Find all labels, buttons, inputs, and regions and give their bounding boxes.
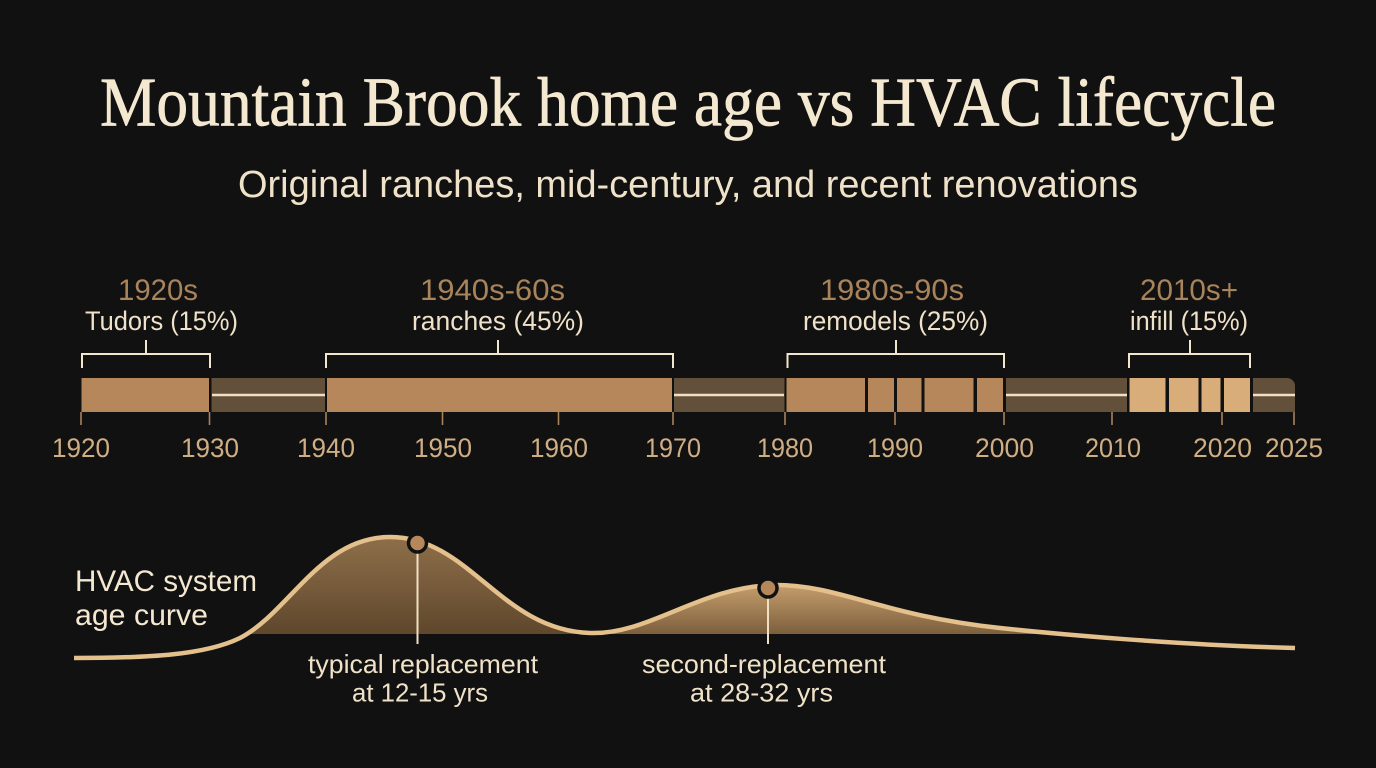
year labels: 2010 xyxy=(1085,433,1141,463)
curve line xyxy=(74,537,1295,658)
era label: 1920s Tudors: Tudors (15%) xyxy=(85,306,238,336)
era label: 1980s-90s remodels xyxy=(803,274,988,336)
year labels: 1920 xyxy=(52,433,110,463)
timeline bar xyxy=(82,378,1295,412)
annotation: second replacement xyxy=(642,649,887,708)
era label: 1940s-60s ranches: ranches (45%) xyxy=(412,306,584,336)
year ticks xyxy=(81,412,1294,425)
title: Mountain Brook home age vs HVAC lifecycle xyxy=(100,64,1276,142)
era label: 1920s Tudors xyxy=(85,274,238,336)
era label: 2010s+ infill: infill (15%) xyxy=(1130,306,1248,336)
annotation: second replacement: at 28-32 yrs xyxy=(690,678,833,708)
HVAC age curve chart xyxy=(74,534,1296,660)
year labels: 2000 xyxy=(975,433,1034,463)
year labels: 1980 xyxy=(757,433,813,463)
era label: 1980s-90s remodels: remodels (25%) xyxy=(803,306,988,336)
era label: 2010s+ infill: 2010s+ xyxy=(1140,274,1238,307)
year labels: 1940 xyxy=(297,433,355,463)
year labels: 2020 xyxy=(1193,433,1252,463)
year labels: 1950 xyxy=(414,433,472,463)
subtitle: Original ranches, mid-century, and recent renovations xyxy=(238,164,1138,206)
marker: second replacement xyxy=(759,579,777,644)
infographic canvas xyxy=(54,76,1322,707)
year labels: 1960 xyxy=(530,433,588,463)
year labels: 1930 xyxy=(181,433,239,463)
year labels: 1990 xyxy=(867,433,923,463)
era label: 1940s-60s ranches: 1940s-60s xyxy=(420,274,565,307)
year labels: 1970 xyxy=(645,433,701,463)
area fill: first replacement hump xyxy=(251,539,576,634)
year labels: 2025 xyxy=(1265,433,1323,463)
chart label: HVAC system age curve: age curve xyxy=(75,599,208,632)
year labels xyxy=(52,433,1323,463)
era label: 1940s-60s ranches xyxy=(412,274,584,336)
area fill: second replacement hump xyxy=(610,587,1036,634)
era label: 1920s Tudors: 1920s xyxy=(118,274,198,307)
housing era blocks xyxy=(82,378,1003,412)
chart label: HVAC system age curve: HVAC system xyxy=(75,565,257,598)
gap lines in track xyxy=(212,394,1295,396)
annotation: typical replacement xyxy=(308,649,539,708)
marker: typical replacement xyxy=(408,534,426,644)
brackets over timeline eras xyxy=(82,340,1250,368)
chart label: HVAC system age curve xyxy=(75,565,257,632)
annotation: typical replacement: typical replacement xyxy=(308,649,539,679)
era label: 1980s-90s remodels: 1980s-90s xyxy=(820,274,964,307)
infill era blocks xyxy=(1130,378,1250,412)
annotation: second replacement: second-replacement xyxy=(642,649,887,679)
era label: 2010s+ infill xyxy=(1130,274,1248,336)
annotation: typical replacement: at 12-15 yrs xyxy=(352,678,488,708)
timeline track segments xyxy=(212,378,1295,412)
